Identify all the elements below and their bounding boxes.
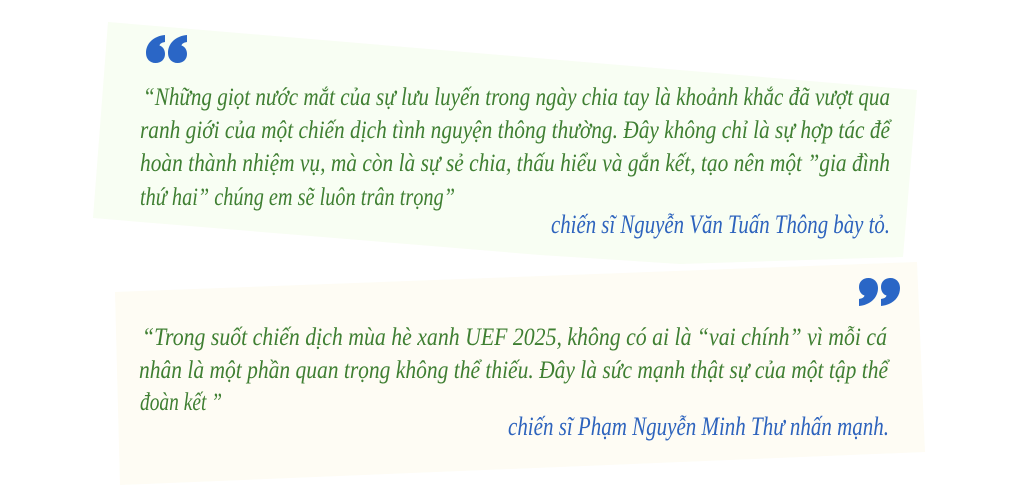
quote text: second quote bbox=[139, 324, 890, 416]
panel: second quote bbox=[115, 262, 925, 485]
quote text: second quote: “Trong suốt chiến dịch mùa hè xanh UEF 2025, không có ai là “vai chính” vì mỗi cá bbox=[142, 324, 887, 351]
icon: opening quotation mark bbox=[146, 35, 187, 63]
quote text: second quote: nhân là một phần quan trọng không thể thiếu. Đây là sức mạnh thật sự của một tập thể bbox=[139, 357, 890, 384]
quote text: first quote: thứ hai” chúng em sẽ luôn trân trọng” bbox=[140, 184, 455, 211]
quote text: first quote: hoàn thành nhiệm vụ, mà còn là sự sẻ chia, thấu hiểu và gắn kết, tạo nên một ”gia đình bbox=[140, 150, 890, 177]
panel: first quote bbox=[93, 22, 917, 264]
quote text: first quote: ranh giới của một chiến dịch tình nguyện thông thường. Đây không chỉ là sự hợp tác để bbox=[140, 117, 892, 144]
quote text: first quote: “Những giọt nước mắt của sự lưu luyến trong ngày chia tay là khoảnh khắc đã vượt qua bbox=[143, 84, 890, 111]
attribution: first quote: chiến sĩ Nguyễn Văn Tuấn Thông bày tỏ. bbox=[551, 210, 890, 239]
quote text: first quote bbox=[140, 84, 892, 211]
quote text: second quote: đoàn kết ” bbox=[140, 389, 222, 416]
icon: closing quotation mark bbox=[859, 278, 900, 306]
attribution: second quote: chiến sĩ Phạm Nguyễn Minh Thư nhấn mạnh. bbox=[508, 412, 889, 441]
